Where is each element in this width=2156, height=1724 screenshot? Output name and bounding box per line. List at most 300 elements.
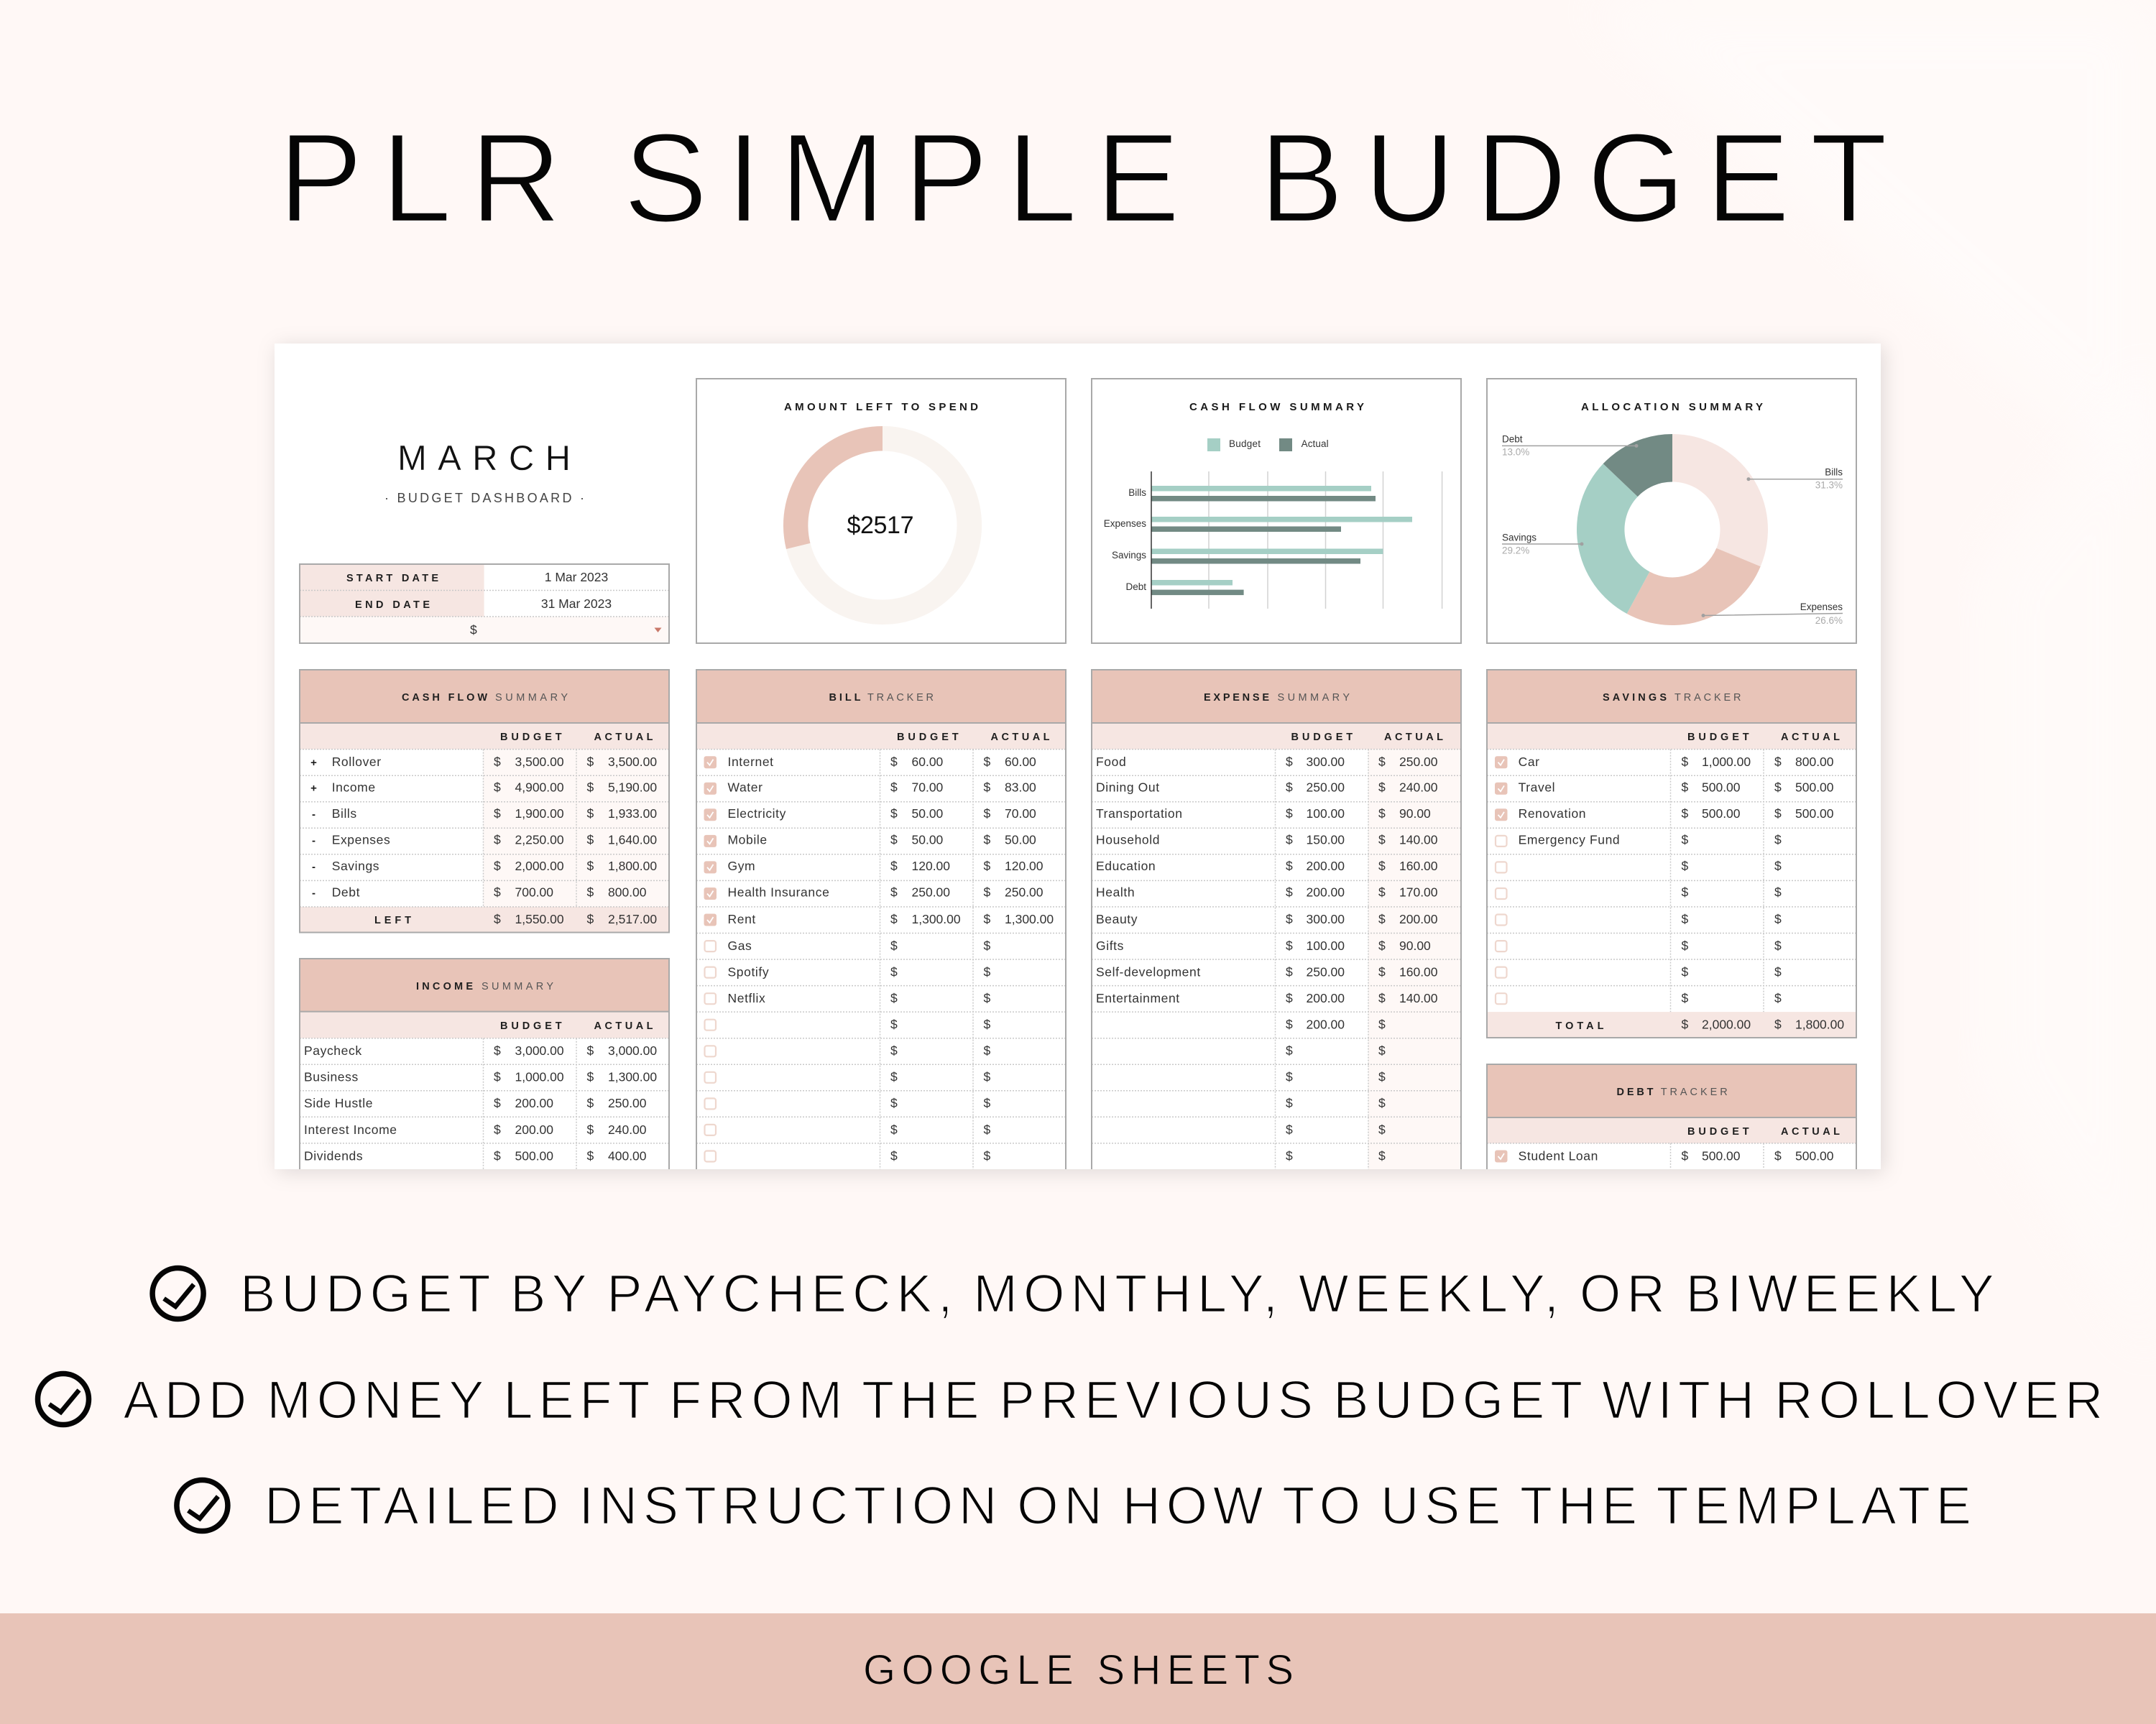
table: cash flow summary: 4,900.00 bbox=[515, 780, 564, 795]
title: SIMPLE bbox=[623, 106, 1198, 249]
table: bill tracker bbox=[696, 670, 1066, 1169]
table: expense summary: $ bbox=[1378, 1070, 1386, 1084]
table: debt tracker: $ bbox=[1774, 1148, 1782, 1163]
table: expense summary: 140.00 bbox=[1399, 991, 1438, 1005]
table: savings tracker: 800.00 bbox=[1795, 755, 1834, 769]
table: cash flow summary: 3,500.00 bbox=[608, 755, 657, 769]
table: savings tracker: TOTAL bbox=[1555, 1020, 1604, 1032]
category labels bbox=[1104, 487, 1146, 592]
table: income summary: INCOME bbox=[416, 981, 473, 992]
table: savings tracker: $ bbox=[1682, 859, 1689, 873]
callouts: Debt bbox=[1502, 433, 1523, 444]
table: bill tracker: $ bbox=[890, 885, 898, 900]
callouts: 26.6% bbox=[1815, 615, 1843, 626]
table: bill tracker: $ bbox=[890, 939, 898, 953]
footer band: GOOGLE SHEETS bbox=[863, 1647, 1294, 1693]
callouts: Expenses bbox=[1800, 601, 1843, 612]
table: bill tracker: $ bbox=[983, 1018, 990, 1032]
table: bill tracker: $ bbox=[983, 1148, 990, 1163]
table: bill tracker: $ bbox=[890, 832, 898, 847]
table: expense summary: Entertainment bbox=[1096, 991, 1180, 1005]
table: bill tracker: $ bbox=[890, 1070, 898, 1084]
table: savings tracker: 1,800.00 bbox=[1795, 1018, 1844, 1032]
table: expense summary: 250.00 bbox=[1307, 964, 1345, 979]
table: expense summary: $ bbox=[1286, 964, 1293, 979]
table: income summary: 500.00 bbox=[515, 1148, 553, 1163]
table: income summary: 250.00 bbox=[608, 1096, 647, 1110]
table: income summary: 3,000.00 bbox=[515, 1043, 564, 1058]
table: expense summary: SUMMARY bbox=[1278, 692, 1350, 704]
table: expense summary: 250.00 bbox=[1307, 780, 1345, 795]
table: expense summary: $ bbox=[1286, 912, 1293, 926]
table: savings tracker: TRACKER bbox=[1674, 692, 1741, 704]
table: expense summary: $ bbox=[1286, 780, 1293, 795]
table: savings tracker: $ bbox=[1774, 806, 1782, 821]
table: expense summary: $ bbox=[1286, 1018, 1293, 1032]
chart: amount left to spend bbox=[696, 379, 1066, 643]
table: savings tracker: $ bbox=[1774, 939, 1782, 953]
month heading: · BUDGET DASHBOARD · bbox=[384, 491, 584, 505]
table: income summary: $ bbox=[494, 1123, 501, 1137]
table: income summary: Interest Income bbox=[304, 1123, 397, 1137]
table: cash flow summary: 1,800.00 bbox=[608, 859, 657, 873]
table: bill tracker: $ bbox=[890, 912, 898, 926]
footer band bbox=[0, 1613, 2156, 1724]
table: savings tracker: $ bbox=[1682, 964, 1689, 979]
table: debt tracker: BUDGET bbox=[1687, 1126, 1749, 1138]
table: cash flow summary: 2,517.00 bbox=[608, 912, 657, 926]
legend: Budget bbox=[1229, 438, 1261, 449]
table: expense summary: ACTUAL bbox=[1384, 732, 1443, 743]
legend bbox=[1207, 438, 1329, 451]
table: savings tracker: 500.00 bbox=[1795, 780, 1834, 795]
table: bill tracker: Mobile bbox=[727, 832, 768, 847]
table: savings tracker: 500.00 bbox=[1702, 806, 1741, 821]
table: expense summary bbox=[1092, 670, 1461, 1169]
table: expense summary: 170.00 bbox=[1399, 885, 1438, 900]
table: expense summary: $ bbox=[1286, 1096, 1293, 1110]
feature 2: ADD MONEY LEFT FROM THE PREVIOUS BUDGET WITH ROLLOVER bbox=[124, 1370, 2103, 1430]
date table: END DATE bbox=[355, 599, 430, 611]
table: savings tracker: $ bbox=[1682, 832, 1689, 847]
table: cash flow summary: BUDGET bbox=[500, 732, 562, 743]
table: bill tracker: $ bbox=[983, 1043, 990, 1058]
table: savings tracker: ACTUAL bbox=[1781, 732, 1840, 743]
callouts: 31.3% bbox=[1815, 480, 1843, 491]
table: expense summary: 200.00 bbox=[1307, 885, 1345, 900]
chart: allocation summary: ALLOCATION SUMMARY bbox=[1581, 401, 1763, 413]
table: cash flow summary: 2,250.00 bbox=[515, 832, 564, 847]
table: expense summary: 100.00 bbox=[1307, 939, 1345, 953]
table: expense summary: Education bbox=[1096, 859, 1156, 873]
table: bill tracker: $ bbox=[983, 859, 990, 873]
table: bill tracker: $ bbox=[983, 964, 990, 979]
table: bill tracker: 1,300.00 bbox=[1005, 912, 1054, 926]
chart: cash flow summary bbox=[1092, 379, 1461, 643]
table: savings tracker: 500.00 bbox=[1795, 806, 1834, 821]
table: cash flow summary: 1,933.00 bbox=[608, 806, 657, 821]
table: bill tracker: Electricity bbox=[727, 806, 786, 821]
table: bill tracker: $ bbox=[983, 991, 990, 1005]
table: income summary: Business bbox=[304, 1070, 359, 1084]
table: cash flow summary: 1,550.00 bbox=[515, 912, 564, 926]
table: expense summary: $ bbox=[1378, 1043, 1386, 1058]
table: bill tracker: Gas bbox=[727, 939, 752, 953]
table: bill tracker: 50.00 bbox=[911, 806, 944, 821]
table: savings tracker: BUDGET bbox=[1687, 732, 1749, 743]
table: savings tracker: $ bbox=[1774, 964, 1782, 979]
table: bill tracker: Gym bbox=[727, 859, 755, 873]
table: cash flow summary: $ bbox=[586, 806, 594, 821]
table: bill tracker: $ bbox=[983, 780, 990, 795]
table: expense summary: $ bbox=[1378, 806, 1386, 821]
table: expense summary: $ bbox=[1286, 885, 1293, 900]
table: expense summary: 200.00 bbox=[1307, 859, 1345, 873]
table: expense summary: $ bbox=[1378, 1123, 1386, 1137]
table: savings tracker: $ bbox=[1682, 885, 1689, 900]
table: income summary: BUDGET bbox=[500, 1020, 562, 1032]
table: expense summary: $ bbox=[1286, 991, 1293, 1005]
table: cash flow summary: $ bbox=[494, 859, 501, 873]
table: expense summary: $ bbox=[1378, 832, 1386, 847]
table: bill tracker: $ bbox=[983, 939, 990, 953]
table: savings tracker: Renovation bbox=[1519, 806, 1586, 821]
table: income summary: $ bbox=[494, 1148, 501, 1163]
table: bill tracker: $ bbox=[890, 780, 898, 795]
table: bill tracker: $ bbox=[890, 859, 898, 873]
table: expense summary: $ bbox=[1378, 964, 1386, 979]
table: expense summary: 100.00 bbox=[1307, 806, 1345, 821]
table: cash flow summary: $ bbox=[494, 912, 501, 926]
table: bill tracker: 83.00 bbox=[1005, 780, 1036, 795]
table: expense summary: 160.00 bbox=[1399, 859, 1438, 873]
table: expense summary: 300.00 bbox=[1307, 912, 1345, 926]
table: savings tracker: $ bbox=[1682, 912, 1689, 926]
table: bill tracker: $ bbox=[890, 991, 898, 1005]
table: debt tracker: $ bbox=[1682, 1148, 1689, 1163]
table: income summary: 3,000.00 bbox=[608, 1043, 657, 1058]
date table: START DATE bbox=[346, 573, 438, 584]
table: bill tracker: 60.00 bbox=[1005, 755, 1036, 769]
donut bbox=[1577, 434, 1768, 625]
table: income summary: $ bbox=[586, 1123, 594, 1137]
table: bill tracker: 60.00 bbox=[911, 755, 944, 769]
table: expense summary: 300.00 bbox=[1307, 755, 1345, 769]
table: debt tracker: 500.00 bbox=[1702, 1148, 1741, 1163]
dropdown arrow bbox=[654, 628, 661, 632]
callouts: 29.2% bbox=[1502, 545, 1529, 556]
table: savings tracker: 1,000.00 bbox=[1702, 755, 1751, 769]
table: cash flow summary: 2,000.00 bbox=[515, 859, 564, 873]
table: income summary: $ bbox=[586, 1043, 594, 1058]
table: income summary: $ bbox=[586, 1148, 594, 1163]
table: expense summary: 160.00 bbox=[1399, 964, 1438, 979]
table: bill tracker: Health Insurance bbox=[727, 885, 829, 900]
table: cash flow summary: Savings bbox=[332, 859, 379, 873]
table: expense summary: 200.00 bbox=[1307, 1018, 1345, 1032]
table: cash flow summary: $ bbox=[586, 885, 594, 900]
feature list bbox=[37, 1263, 2103, 1535]
table: debt tracker: 500.00 bbox=[1795, 1148, 1834, 1163]
chart: amount left to spend: AMOUNT LEFT TO SPEND bbox=[784, 401, 978, 413]
table: savings tracker: $ bbox=[1774, 780, 1782, 795]
table: expense summary: Food bbox=[1096, 755, 1126, 769]
table: cash flow summary: $ bbox=[494, 806, 501, 821]
table: bill tracker: $ bbox=[890, 1123, 898, 1137]
table: savings tracker: $ bbox=[1682, 1018, 1689, 1032]
table: expense summary: $ bbox=[1378, 1096, 1386, 1110]
table: expense summary: $ bbox=[1286, 806, 1293, 821]
table: cash flow summary: - bbox=[312, 887, 315, 900]
table: expense summary: $ bbox=[1286, 1043, 1293, 1058]
table: savings tracker: 500.00 bbox=[1702, 780, 1741, 795]
table: cash flow summary: 800.00 bbox=[608, 885, 647, 900]
table: bill tracker: $ bbox=[890, 1096, 898, 1110]
table: expense summary: $ bbox=[1378, 1018, 1386, 1032]
table: bill tracker: $ bbox=[983, 1096, 990, 1110]
table: bill tracker: $ bbox=[890, 806, 898, 821]
table: expense summary: Transportation bbox=[1096, 806, 1183, 821]
table: debt tracker: ACTUAL bbox=[1781, 1126, 1840, 1138]
table: expense summary: 90.00 bbox=[1399, 806, 1431, 821]
table: expense summary: $ bbox=[1378, 755, 1386, 769]
table: savings tracker: Emergency Fund bbox=[1519, 832, 1620, 847]
table: bill tracker: Netflix bbox=[727, 991, 765, 1005]
table: cash flow summary: 5,190.00 bbox=[608, 780, 657, 795]
table: cash flow summary: Income bbox=[332, 780, 376, 795]
table: bill tracker: 120.00 bbox=[1005, 859, 1044, 873]
table: bill tracker: $ bbox=[983, 1070, 990, 1084]
table: bill tracker: Water bbox=[727, 780, 763, 795]
table: bill tracker: Rent bbox=[727, 912, 756, 926]
table: cash flow summary: $ bbox=[586, 755, 594, 769]
table: expense summary: $ bbox=[1378, 859, 1386, 873]
table: income summary: SUMMARY bbox=[482, 981, 553, 992]
table: bill tracker: ACTUAL bbox=[990, 732, 1050, 743]
table: bill tracker: $ bbox=[983, 806, 990, 821]
table: expense summary: Gifts bbox=[1096, 939, 1124, 953]
table: cash flow summary: + bbox=[310, 782, 317, 795]
table: savings tracker: $ bbox=[1774, 859, 1782, 873]
table: debt tracker: Student Loan bbox=[1519, 1148, 1598, 1163]
feature 1: BUDGET BY PAYCHECK, MONTHLY, WEEKLY, OR BIWEEKLY bbox=[240, 1263, 1994, 1324]
table: expense summary: $ bbox=[1378, 912, 1386, 926]
table: cash flow summary: CASH FLOW bbox=[402, 692, 487, 704]
table: cash flow summary: $ bbox=[586, 832, 594, 847]
table: expense summary: $ bbox=[1378, 780, 1386, 795]
table: expense summary: Health bbox=[1096, 885, 1135, 900]
table: expense summary: 200.00 bbox=[1399, 912, 1438, 926]
callouts: Savings bbox=[1502, 532, 1537, 543]
table: expense summary: Beauty bbox=[1096, 912, 1138, 926]
table: bill tracker: 70.00 bbox=[911, 780, 944, 795]
table: bill tracker: $ bbox=[983, 1123, 990, 1137]
table: income summary: 200.00 bbox=[515, 1123, 553, 1137]
table: savings tracker: 2,000.00 bbox=[1702, 1018, 1751, 1032]
table: cash flow summary: - bbox=[312, 835, 315, 847]
table: bill tracker: TRACKER bbox=[867, 692, 934, 704]
table: bill tracker: BUDGET bbox=[897, 732, 959, 743]
category labels: Expenses bbox=[1104, 518, 1146, 529]
table: expense summary: 150.00 bbox=[1307, 832, 1345, 847]
table: bill tracker: $ bbox=[983, 912, 990, 926]
table: savings tracker: $ bbox=[1682, 780, 1689, 795]
table: savings tracker: $ bbox=[1774, 1018, 1782, 1032]
table: expense summary: $ bbox=[1286, 1123, 1293, 1137]
table: cash flow summary: 3,500.00 bbox=[515, 755, 564, 769]
table: cash flow summary: $ bbox=[494, 755, 501, 769]
table: bill tracker: $ bbox=[890, 1043, 898, 1058]
table: savings tracker: Car bbox=[1519, 755, 1540, 769]
table: bill tracker: BILL bbox=[829, 692, 861, 704]
table: cash flow summary: + bbox=[310, 757, 317, 769]
table: bill tracker: Spotify bbox=[727, 964, 769, 979]
table: cash flow summary: Bills bbox=[332, 806, 357, 821]
title: PLR bbox=[278, 106, 580, 249]
table: expense summary: 200.00 bbox=[1307, 991, 1345, 1005]
table: bill tracker: $ bbox=[983, 755, 990, 769]
table: expense summary: $ bbox=[1378, 885, 1386, 900]
table: savings tracker: $ bbox=[1774, 885, 1782, 900]
table: expense summary: $ bbox=[1286, 832, 1293, 847]
table: income summary: $ bbox=[586, 1070, 594, 1084]
date table: 1 Mar 2023 bbox=[545, 570, 608, 584]
table: savings tracker: $ bbox=[1682, 991, 1689, 1005]
table: cash flow summary: Debt bbox=[332, 885, 360, 900]
table: income summary: Dividends bbox=[304, 1148, 363, 1163]
table: savings tracker: $ bbox=[1774, 755, 1782, 769]
table: savings tracker: $ bbox=[1682, 939, 1689, 953]
table: debt tracker: DEBT bbox=[1617, 1087, 1654, 1098]
table: savings tracker: $ bbox=[1682, 806, 1689, 821]
table: income summary: 240.00 bbox=[608, 1123, 647, 1137]
table: expense summary: BUDGET bbox=[1291, 732, 1353, 743]
table: cash flow summary: $ bbox=[586, 912, 594, 926]
table: cash flow summary: Rollover bbox=[332, 755, 382, 769]
table: cash flow summary: 1,900.00 bbox=[515, 806, 564, 821]
table: bill tracker: 50.00 bbox=[911, 832, 944, 847]
table: bill tracker: 70.00 bbox=[1005, 806, 1036, 821]
table: bill tracker: 1,300.00 bbox=[911, 912, 961, 926]
table: expense summary: 250.00 bbox=[1399, 755, 1438, 769]
table: debt tracker: TRACKER bbox=[1661, 1087, 1728, 1098]
table: expense summary: $ bbox=[1286, 859, 1293, 873]
callouts bbox=[1502, 433, 1843, 626]
table: bill tracker: Internet bbox=[727, 755, 774, 769]
table: income summary: 400.00 bbox=[608, 1148, 647, 1163]
table: savings tracker: SAVINGS bbox=[1603, 692, 1667, 704]
bars bbox=[1151, 486, 1412, 595]
table: income summary: 200.00 bbox=[515, 1096, 553, 1110]
legend: Actual bbox=[1302, 438, 1329, 449]
table: income summary: ACTUAL bbox=[594, 1020, 653, 1032]
table: savings tracker: Travel bbox=[1519, 780, 1555, 795]
table: expense summary: $ bbox=[1378, 991, 1386, 1005]
table: income summary: 1,000.00 bbox=[515, 1070, 564, 1084]
table: cash flow summary: - bbox=[312, 861, 315, 873]
table: expense summary: $ bbox=[1378, 1148, 1386, 1163]
table: bill tracker: $ bbox=[983, 832, 990, 847]
table: savings tracker: $ bbox=[1682, 755, 1689, 769]
chart: amount left to spend: $2517 bbox=[847, 512, 914, 539]
table: expense summary: $ bbox=[1286, 755, 1293, 769]
table: cash flow summary: $ bbox=[494, 780, 501, 795]
table: cash flow summary: ACTUAL bbox=[594, 732, 653, 743]
date table bbox=[300, 564, 669, 643]
callouts: Bills bbox=[1825, 467, 1843, 478]
table: cash flow summary: Expenses bbox=[332, 832, 390, 847]
table: bill tracker: $ bbox=[890, 755, 898, 769]
table: income summary: $ bbox=[586, 1096, 594, 1110]
table: savings tracker bbox=[1487, 670, 1856, 1038]
table: bill tracker: $ bbox=[890, 1018, 898, 1032]
category labels: Debt bbox=[1125, 581, 1146, 592]
table: cash flow summary: $ bbox=[494, 832, 501, 847]
table: income summary: $ bbox=[494, 1070, 501, 1084]
month heading: MARCH bbox=[397, 439, 571, 478]
table: expense summary: $ bbox=[1286, 1148, 1293, 1163]
feature 3: DETAILED INSTRUCTION ON HOW TO USE THE TEMPLATE bbox=[264, 1476, 1971, 1535]
table: cash flow summary: $ bbox=[586, 859, 594, 873]
table: cash flow summary: LEFT bbox=[374, 915, 411, 926]
table: bill tracker: 50.00 bbox=[1005, 832, 1036, 847]
table: expense summary: Dining Out bbox=[1096, 780, 1160, 795]
table: cash flow summary: - bbox=[312, 808, 315, 821]
category labels: Savings bbox=[1112, 550, 1146, 561]
table: income summary: $ bbox=[494, 1096, 501, 1110]
chart: cash flow summary: CASH FLOW SUMMARY bbox=[1189, 401, 1364, 413]
table: bill tracker: $ bbox=[983, 885, 990, 900]
table: expense summary: 90.00 bbox=[1399, 939, 1431, 953]
callouts: 13.0% bbox=[1502, 446, 1529, 457]
table: bill tracker: 120.00 bbox=[911, 859, 950, 873]
table: cash flow summary: $ bbox=[586, 780, 594, 795]
table: expense summary: $ bbox=[1378, 939, 1386, 953]
table: cash flow summary bbox=[300, 670, 669, 933]
table: income summary: Side Hustle bbox=[304, 1096, 373, 1110]
table: savings tracker: $ bbox=[1774, 832, 1782, 847]
table: cash flow summary: SUMMARY bbox=[495, 692, 568, 704]
table: expense summary: EXPENSE bbox=[1204, 692, 1269, 704]
date table: $ bbox=[470, 622, 477, 637]
table: income summary bbox=[300, 959, 669, 1169]
table: income summary: Paycheck bbox=[304, 1043, 362, 1058]
table: cash flow summary: 700.00 bbox=[515, 885, 553, 900]
table: bill tracker: $ bbox=[890, 964, 898, 979]
table: bill tracker: $ bbox=[890, 1148, 898, 1163]
table: expense summary: 240.00 bbox=[1399, 780, 1438, 795]
table: expense summary: $ bbox=[1286, 939, 1293, 953]
table: debt tracker bbox=[1487, 1064, 1856, 1169]
chart: allocation summary bbox=[1487, 379, 1856, 643]
table: expense summary: 140.00 bbox=[1399, 832, 1438, 847]
table: bill tracker: 250.00 bbox=[911, 885, 950, 900]
table: income summary: 1,300.00 bbox=[608, 1070, 657, 1084]
table: income summary: $ bbox=[494, 1043, 501, 1058]
table: cash flow summary: 1,640.00 bbox=[608, 832, 657, 847]
panel: dashboard card bbox=[275, 344, 1881, 1169]
date table: 31 Mar 2023 bbox=[541, 596, 612, 611]
table: expense summary: $ bbox=[1286, 1070, 1293, 1084]
table: expense summary: Self-development bbox=[1096, 964, 1201, 979]
table: savings tracker: $ bbox=[1774, 991, 1782, 1005]
table: bill tracker: 250.00 bbox=[1005, 885, 1044, 900]
title: BUDGET bbox=[1259, 106, 1907, 249]
table: cash flow summary: $ bbox=[494, 885, 501, 900]
category labels: Bills bbox=[1128, 487, 1146, 498]
table: savings tracker: $ bbox=[1774, 912, 1782, 926]
table: expense summary: Household bbox=[1096, 832, 1160, 847]
